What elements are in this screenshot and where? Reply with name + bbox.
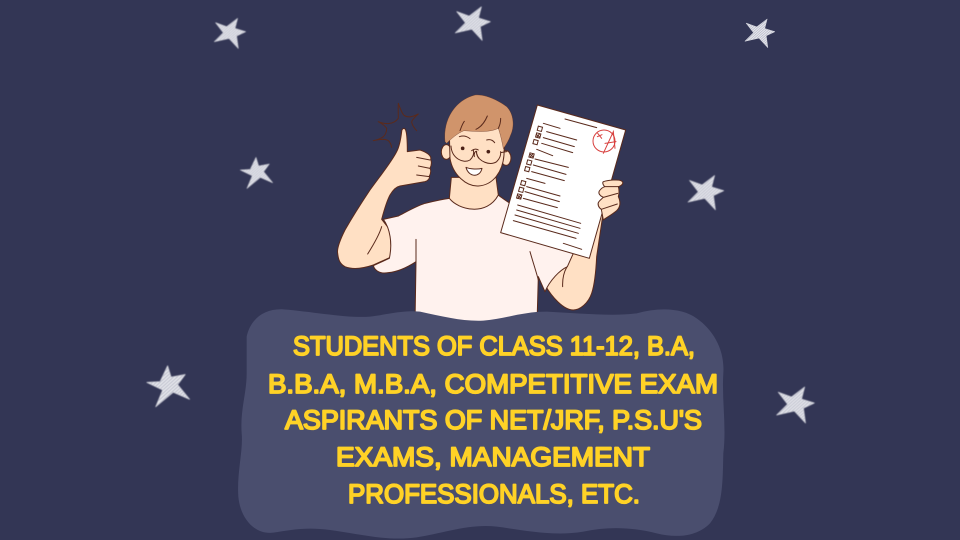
audience text: STUDENTS OF CLASS 11-12, B.A, bbox=[293, 331, 695, 361]
star: top right bbox=[745, 19, 775, 48]
question lines bbox=[513, 119, 597, 249]
fingers on paper bbox=[598, 180, 623, 220]
star: lower right bbox=[777, 387, 814, 423]
star: middle left bbox=[240, 157, 273, 188]
arm and shirt creases bbox=[368, 227, 567, 287]
checkboxes bbox=[517, 126, 543, 199]
glasses and eyes bbox=[451, 136, 507, 163]
spark lines bbox=[373, 103, 418, 147]
thumb finger folds bbox=[417, 157, 430, 177]
star: middle right bbox=[688, 176, 724, 210]
left arm with thumbs-up hand bbox=[337, 129, 431, 268]
hair bbox=[445, 95, 513, 149]
star: top centre bbox=[455, 7, 490, 40]
exam paper bbox=[501, 105, 626, 258]
illustration: student holding exam paper bbox=[337, 95, 626, 323]
face bbox=[449, 120, 505, 186]
audience text: B.B.A, M.B.A, COMPETITIVE EXAM bbox=[268, 369, 718, 399]
t-shirt bbox=[373, 195, 573, 323]
ears bbox=[441, 145, 511, 165]
neck bbox=[449, 177, 498, 209]
hair strands bbox=[460, 116, 501, 131]
smile bbox=[466, 167, 482, 175]
text panel blob bbox=[238, 309, 725, 539]
star: lower left bbox=[147, 366, 190, 407]
right arm bbox=[545, 207, 605, 310]
red grade stamp bbox=[593, 130, 616, 153]
star: top left bbox=[214, 18, 246, 48]
audience text: ASPIRANTS OF NET/JRF, P.S.U'S bbox=[285, 405, 702, 435]
audience text bbox=[268, 331, 718, 509]
finger folds bbox=[601, 187, 618, 209]
audience text: EXAMS, MANAGEMENT bbox=[336, 442, 650, 472]
audience text: PROFESSIONALS, ETC. bbox=[348, 479, 640, 509]
